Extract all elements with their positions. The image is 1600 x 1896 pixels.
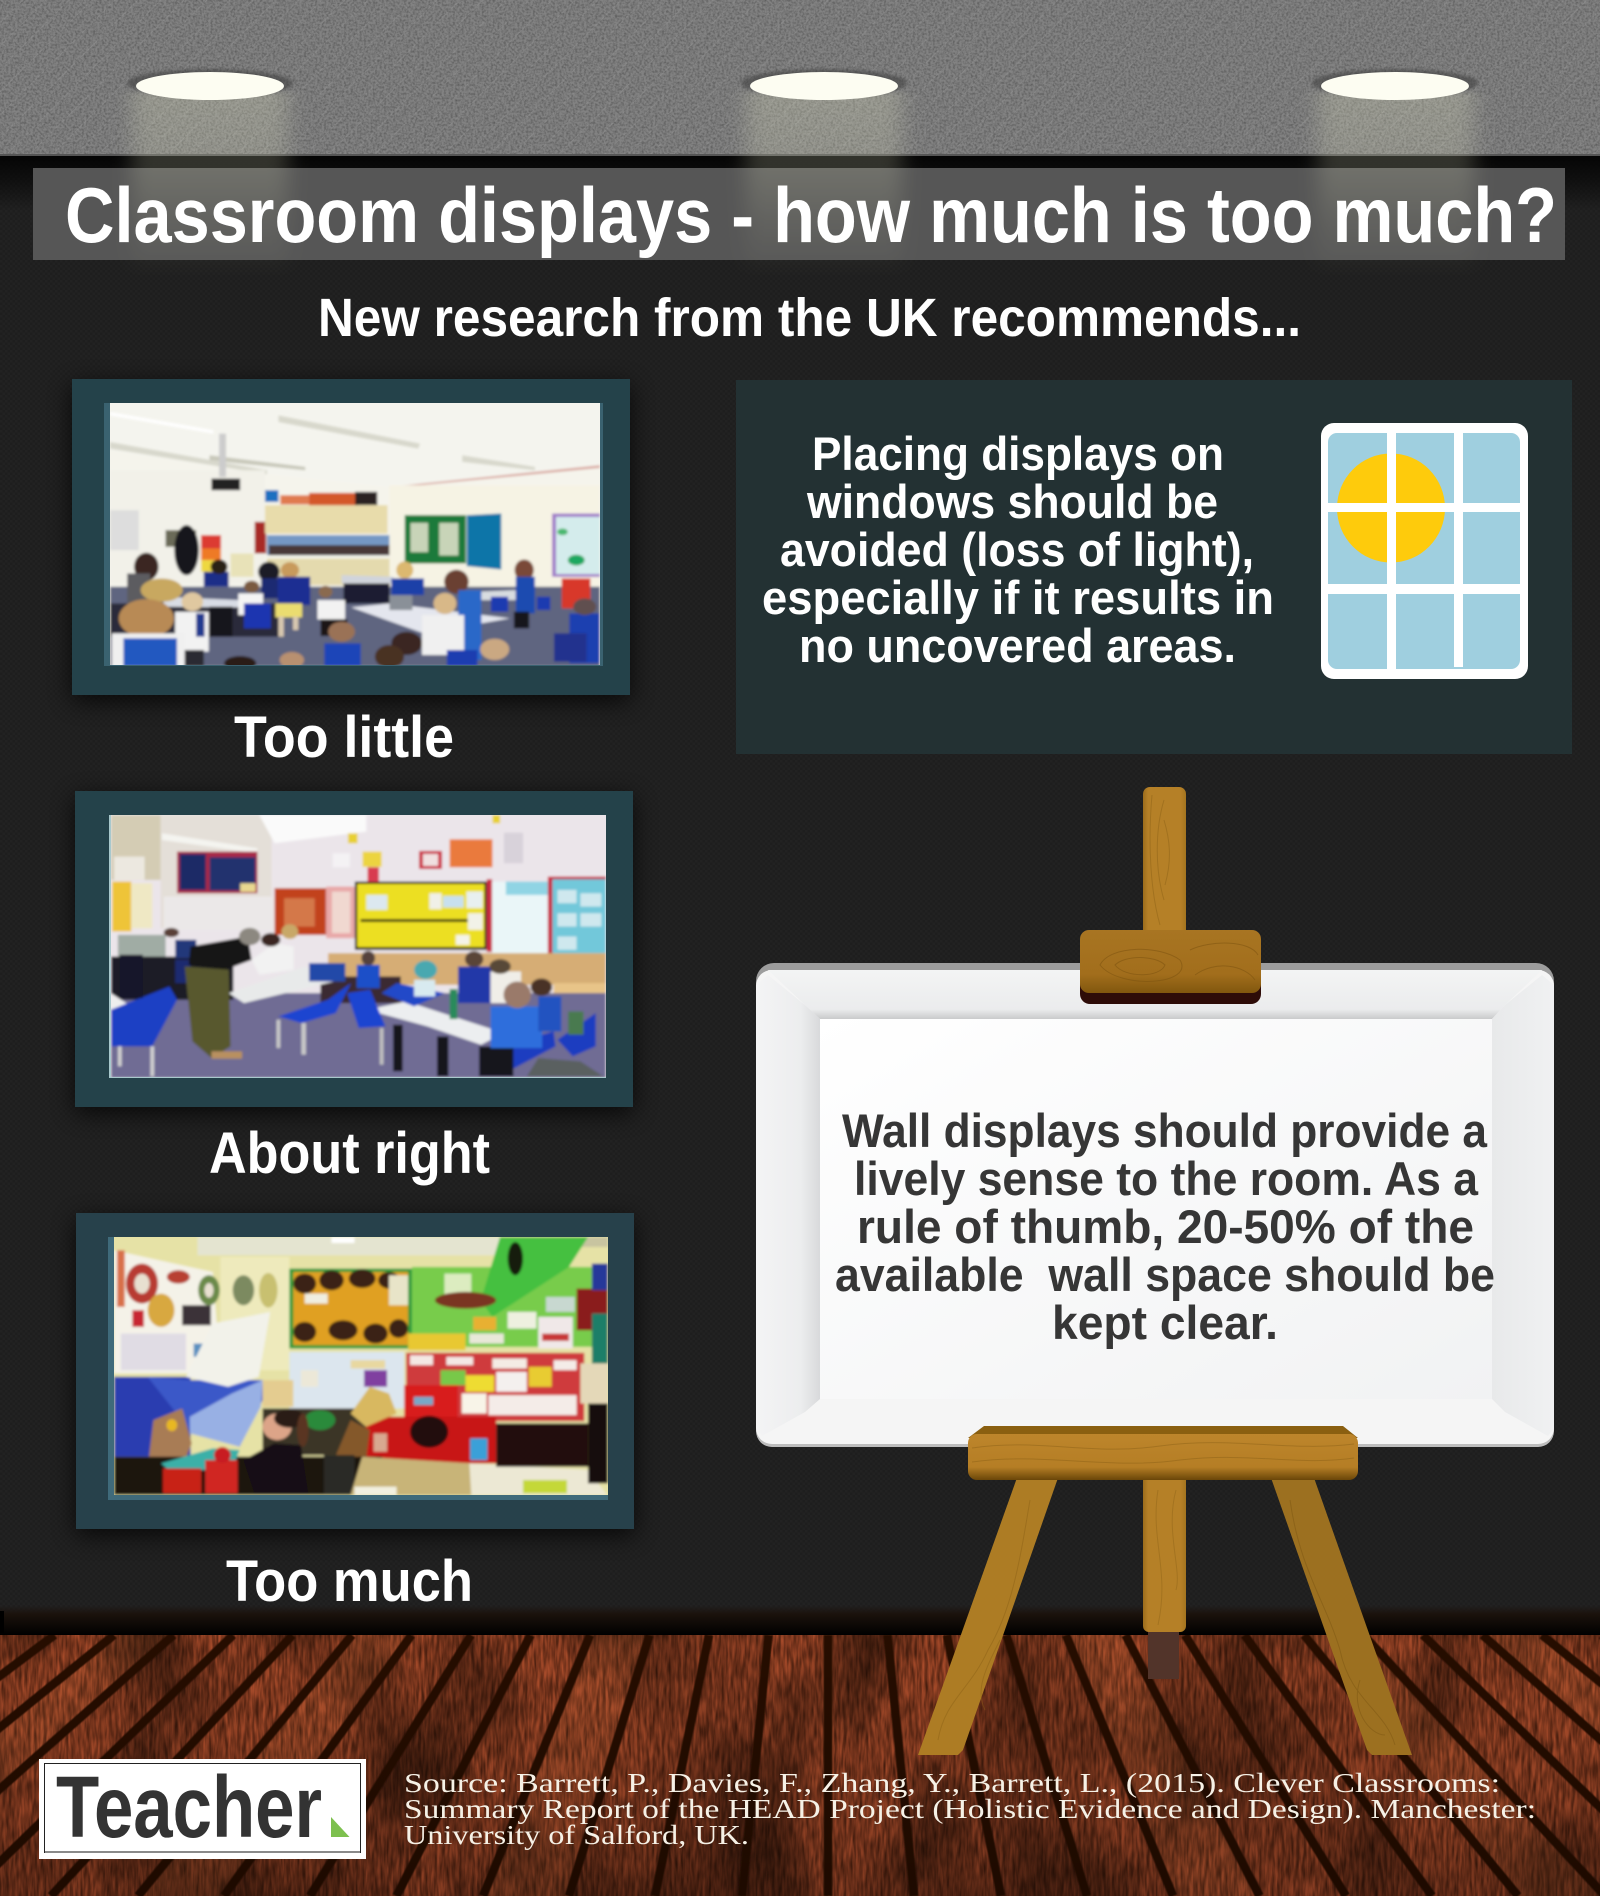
frame bbox=[75, 791, 633, 1107]
panel: too much bbox=[76, 1213, 634, 1614]
centre post bbox=[1143, 1465, 1186, 1632]
whiteboard bbox=[756, 963, 1554, 1447]
advice text: especially if it results in bbox=[762, 571, 1274, 624]
floor bbox=[0, 1630, 1600, 1896]
board text: rule of thumb, 20-50% of the bbox=[857, 1200, 1474, 1253]
advice text bbox=[762, 427, 1274, 672]
advice text: avoided (loss of light), bbox=[780, 523, 1254, 576]
advice text: Placing displays on bbox=[812, 427, 1224, 480]
board text: lively sense to the room. As a bbox=[854, 1152, 1479, 1205]
easel clamp bbox=[1080, 930, 1261, 1004]
advice text: windows should be bbox=[806, 475, 1218, 528]
panel: windows advice bbox=[736, 380, 1572, 754]
board text: Wall displays should provide a bbox=[842, 1104, 1488, 1157]
board surface bbox=[820, 1019, 1492, 1399]
board text: available wall space should be bbox=[835, 1248, 1495, 1301]
frame bbox=[76, 1213, 634, 1529]
panel: about right bbox=[75, 791, 633, 1186]
panel: too little bbox=[72, 379, 630, 770]
title bar bbox=[33, 168, 1565, 260]
right leg bbox=[1270, 1475, 1412, 1755]
board text: kept clear. bbox=[1052, 1296, 1278, 1349]
left leg bbox=[918, 1475, 1059, 1755]
light beams bbox=[132, 92, 1474, 277]
centre post foot bbox=[1148, 1625, 1179, 1679]
board frame bbox=[756, 963, 1554, 1447]
ceiling light 1 bbox=[127, 69, 293, 100]
subtitle: New research from the UK recommends... bbox=[318, 288, 1301, 348]
wall bbox=[0, 156, 1600, 1635]
photo: overcrowded classroom display bbox=[114, 1237, 608, 1495]
ceiling bbox=[0, 0, 1600, 156]
frame bbox=[72, 379, 630, 695]
board text bbox=[835, 1104, 1495, 1349]
label: Too much bbox=[226, 1549, 473, 1614]
source citation: Source: Barrett, P., Davies, F., Zhang, Y., Barrett, L., (2015). Clever Classrooms: bbox=[404, 1768, 1500, 1798]
ceiling light 3 bbox=[1312, 69, 1478, 100]
source citation: Summary Report of the HEAD Project (Holistic Evidence and Design). Manchester: bbox=[404, 1794, 1536, 1824]
icon: window with sun bbox=[1321, 423, 1528, 679]
easel legs bbox=[918, 1465, 1412, 1755]
source citation bbox=[404, 1768, 1536, 1850]
easel shelf bbox=[968, 1426, 1358, 1480]
label: About right bbox=[209, 1121, 490, 1186]
label: Too little bbox=[234, 705, 454, 770]
ceiling light 2 bbox=[741, 69, 907, 100]
photo: balanced classroom display bbox=[111, 815, 606, 1077]
source citation: University of Salford, UK. bbox=[404, 1820, 749, 1850]
photo: sparsely decorated classroom bbox=[110, 403, 600, 665]
advice text: no uncovered areas. bbox=[799, 619, 1236, 672]
logo: Teacher: Teacher bbox=[56, 1759, 322, 1856]
easel top post bbox=[1143, 787, 1186, 937]
